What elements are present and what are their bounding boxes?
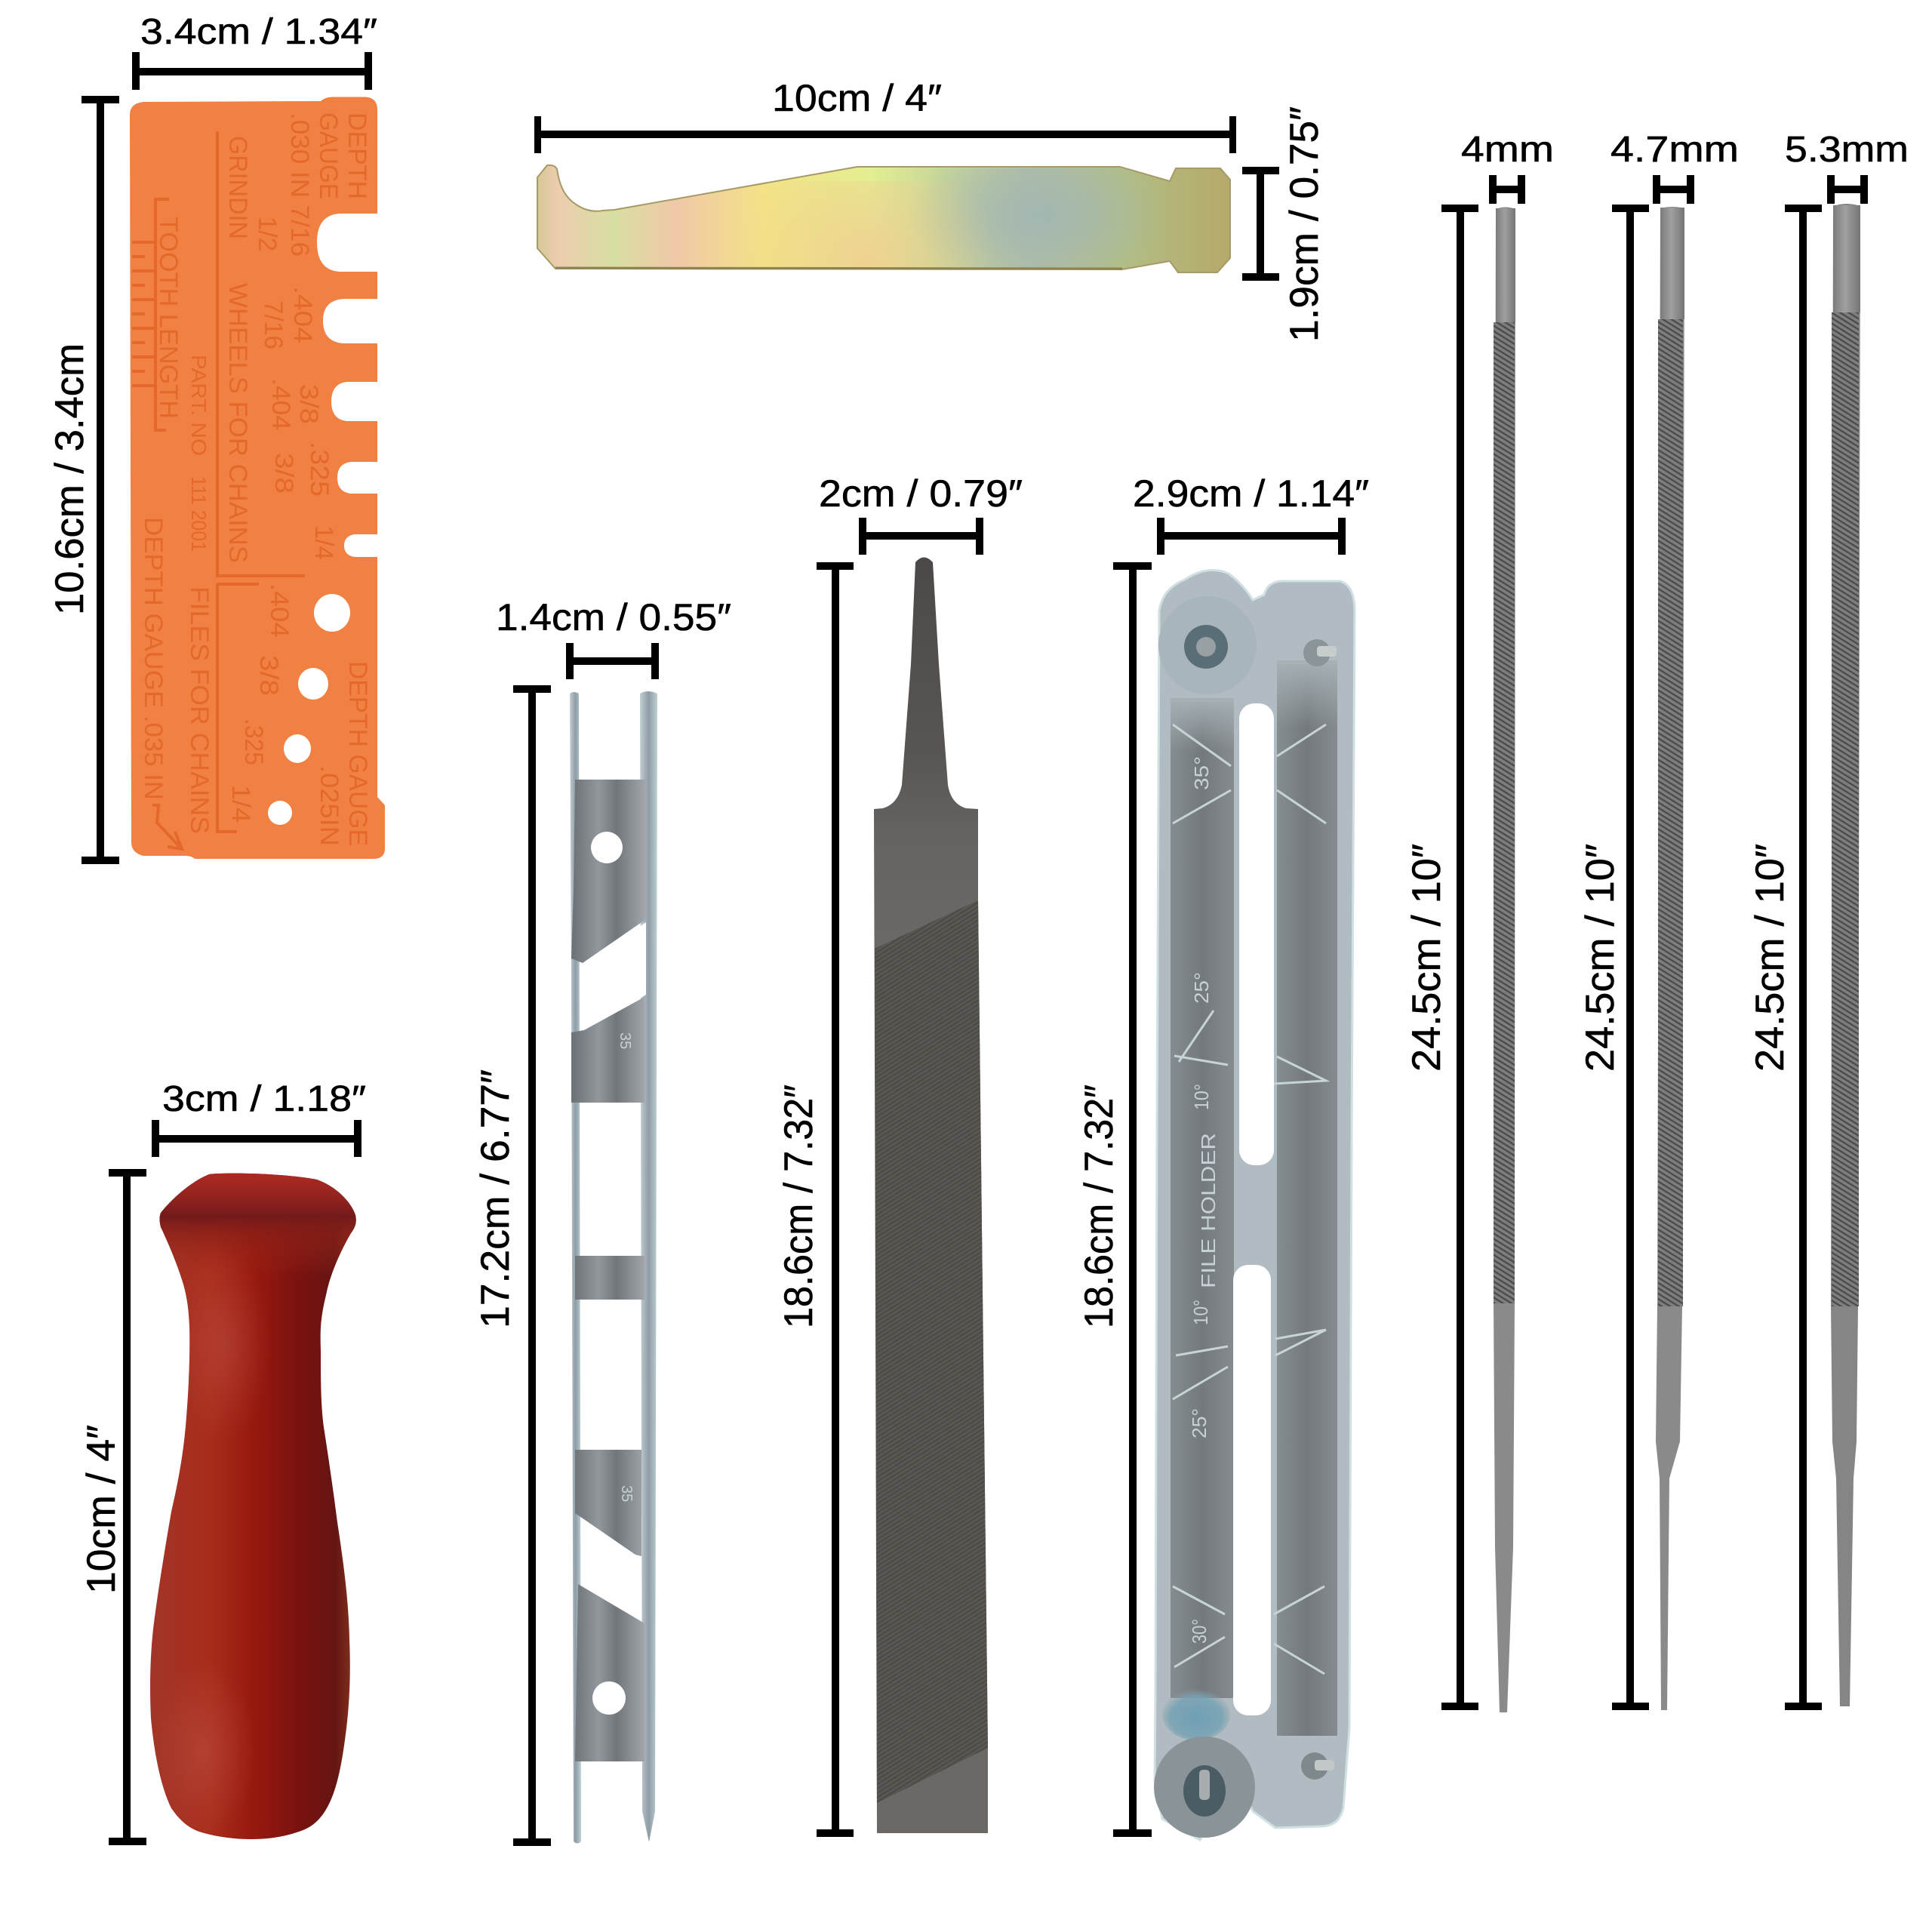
panel: round file 4.7mm: [1656, 207, 1684, 1710]
gauge engraved text: .025IN: [315, 765, 343, 846]
guide angle labels: 35: [618, 1485, 635, 1502]
handle cap shading: [160, 1173, 356, 1266]
gauge engraved text: 7/16: [259, 300, 288, 349]
panel: hook gauge: [537, 165, 1230, 272]
dimension: 4mm file: [1404, 130, 1554, 1710]
panel: filing guide: [570, 691, 657, 1843]
gauge engraved text: .404: [288, 286, 317, 343]
gauge engraved text: 1/4: [226, 785, 255, 823]
holder body: [1155, 571, 1355, 1840]
gauge engraved text: 3/8: [269, 453, 298, 494]
panel: round file 4mm: [1494, 207, 1515, 1712]
dimension: handle width: [152, 1079, 366, 1157]
gauge engraved text: TOOTH LENGTH: [154, 217, 183, 419]
panel: round file 5.3mm: [1831, 204, 1860, 1706]
dimension: 4.7mm file: 24.5cm / 10″: [1578, 844, 1623, 1072]
dimension: handle height: 10cm / 4″: [79, 1425, 124, 1594]
gauge engraved text: .030 IN 7/16: [285, 112, 314, 257]
gauge engraved text: DEPTH GAUGE: [343, 661, 372, 846]
dimension: 4.7mm file: [1578, 130, 1739, 1710]
gauge engraved text: 3/8: [294, 384, 323, 424]
hook gauge blue sheen: [909, 168, 1166, 268]
holder bottom wheel: [1154, 1737, 1255, 1838]
guide angle labels: [617, 1032, 635, 1502]
guide window top: [583, 922, 646, 1030]
dimension: handle height: [79, 1169, 146, 1845]
flat file tang and body: [874, 557, 988, 1833]
guide plate four: [575, 1450, 641, 1556]
hook gauge bottom edge: [555, 268, 1122, 269]
gauge engraved text: FILES FOR CHAINS: [185, 586, 214, 834]
file tang and tip: [1831, 204, 1860, 1706]
file smooth shank: [1660, 208, 1684, 319]
gauge engraved lines: [132, 131, 305, 849]
guide rails: [570, 691, 657, 1843]
dimension: file holder width: [1133, 472, 1369, 555]
holder engraved labels: 10°: [1190, 1084, 1213, 1110]
file teeth: [1832, 312, 1859, 1306]
holder bottom blue highlight: [1162, 1689, 1230, 1740]
gauge engraved text: GRINDIN: [223, 136, 252, 239]
holder engraved labels: 10°: [1189, 1300, 1212, 1325]
dimension: 5.3mm file: 24.5cm / 10″: [1748, 844, 1792, 1072]
dimension: flat file width: [819, 472, 1023, 555]
panel: flat file: [874, 557, 988, 1833]
file tang and tip: [1656, 207, 1684, 1710]
dimension: flat file height: 18.6cm / 7.32″: [777, 1084, 821, 1328]
gauge engraved text: [139, 112, 372, 846]
guide angle labels: 35: [617, 1032, 633, 1049]
guide plate top: [571, 780, 646, 963]
holder translucent top fade left: [1171, 698, 1234, 751]
holder engraved labels: FILE HOLDER: [1197, 1133, 1220, 1288]
dimension: file holder width: 2.9cm / 1.14″: [1133, 472, 1369, 515]
holder left channel: [1171, 702, 1234, 1698]
file teeth: [1658, 319, 1683, 1306]
dimension: gauge height: 10.6cm / 3.4cm: [48, 343, 92, 615]
handle body: [147, 1170, 362, 1841]
gauge engraved text: .325: [305, 441, 334, 497]
gauge engraved text: GAUGE: [314, 112, 343, 199]
gauge engraved text: 1/2: [253, 217, 281, 251]
holder slots: [1233, 703, 1274, 1715]
holder engraved labels: [1188, 756, 1220, 1644]
dimension: file holder height: [1077, 562, 1152, 1837]
gauge engraved text: 111 2001: [187, 476, 211, 552]
file teeth: [1494, 322, 1515, 1303]
dimension: gauge width: [132, 12, 377, 90]
holder top wheel: [1158, 596, 1257, 694]
holder top screw: [1303, 639, 1337, 666]
dimension: hook gauge length: 10cm / 4″: [772, 77, 942, 119]
gauge engraved text: 1/4: [309, 525, 338, 560]
dimension: guide width: [496, 596, 731, 679]
dimension: 4mm file: 4mm: [1461, 130, 1554, 170]
dimension: gauge width: 3.4cm / 1.34″: [140, 12, 377, 52]
gauge engraved text: PART. NO: [187, 355, 211, 456]
file smooth shank: [1496, 208, 1515, 322]
holder right channel: [1277, 664, 1337, 1736]
gauge engraved text: DEPTH GAUGE .035 IN: [139, 517, 168, 800]
gauge engraved text: .325: [239, 718, 268, 765]
dimension: flat file width: 2cm / 0.79″: [819, 472, 1023, 515]
panel: file holder: [1154, 571, 1355, 1840]
gauge engraved text: WHEELS FOR CHAINS: [223, 283, 252, 563]
flat file teeth: [875, 900, 988, 1803]
holder angle lines: [1173, 724, 1326, 1674]
dimension: flat file height: [777, 562, 854, 1837]
hook gauge body: [537, 165, 1230, 272]
dimension: gauge height: [48, 96, 119, 864]
file smooth shank: [1833, 205, 1860, 312]
gauge body: [130, 97, 385, 859]
dimension: guide width: 1.4cm / 0.55″: [496, 596, 731, 638]
dimension: 4.7mm file: 4.7mm: [1611, 130, 1739, 170]
holder translucent top fade right: [1277, 660, 1337, 728]
gauge engraved text: .404: [265, 583, 294, 638]
gauge engraved text: DEPTH: [343, 112, 371, 199]
holder engraved labels: 25°: [1190, 972, 1213, 1004]
holder engraved labels: 30°: [1188, 1619, 1211, 1644]
holder engraved labels: 35°: [1190, 756, 1213, 790]
dimension: hook gauge width: 1.9cm / 0.75″: [1282, 106, 1327, 342]
guide plate five: [575, 1584, 645, 1761]
gauge holes: [268, 594, 350, 825]
guide holes: [591, 832, 626, 1715]
hook gauge warm sheen: [740, 181, 996, 268]
panel: handle: [147, 1170, 362, 1841]
dimension: 4mm file: 24.5cm / 10″: [1404, 844, 1449, 1072]
file tang and tip: [1494, 207, 1515, 1712]
dimension: handle width: 3cm / 1.18″: [162, 1079, 366, 1119]
panel: depth gauge: [130, 97, 385, 859]
dimension: hook gauge length: [534, 77, 1236, 153]
holder bottom screw: [1301, 1752, 1334, 1780]
handle upper highlight: [193, 1279, 257, 1407]
dimension: 5.3mm file: [1748, 130, 1909, 1710]
dimension: file holder height: 18.6cm / 7.32″: [1077, 1084, 1121, 1328]
gauge engraved text: .404: [266, 378, 295, 430]
dimension: 5.3mm file: 5.3mm: [1785, 130, 1909, 170]
dimension: guide height: 17.2cm / 6.77″: [473, 1069, 518, 1328]
gauge engraved text: 3/8: [254, 655, 283, 696]
guide plate two: [571, 997, 645, 1103]
guide plate three: [575, 1256, 645, 1300]
dimension: guide height: [473, 685, 551, 1846]
handle lower highlight: [175, 1695, 239, 1807]
dimension: hook gauge width: [1242, 106, 1327, 342]
holder engraved labels: 25°: [1188, 1408, 1211, 1438]
